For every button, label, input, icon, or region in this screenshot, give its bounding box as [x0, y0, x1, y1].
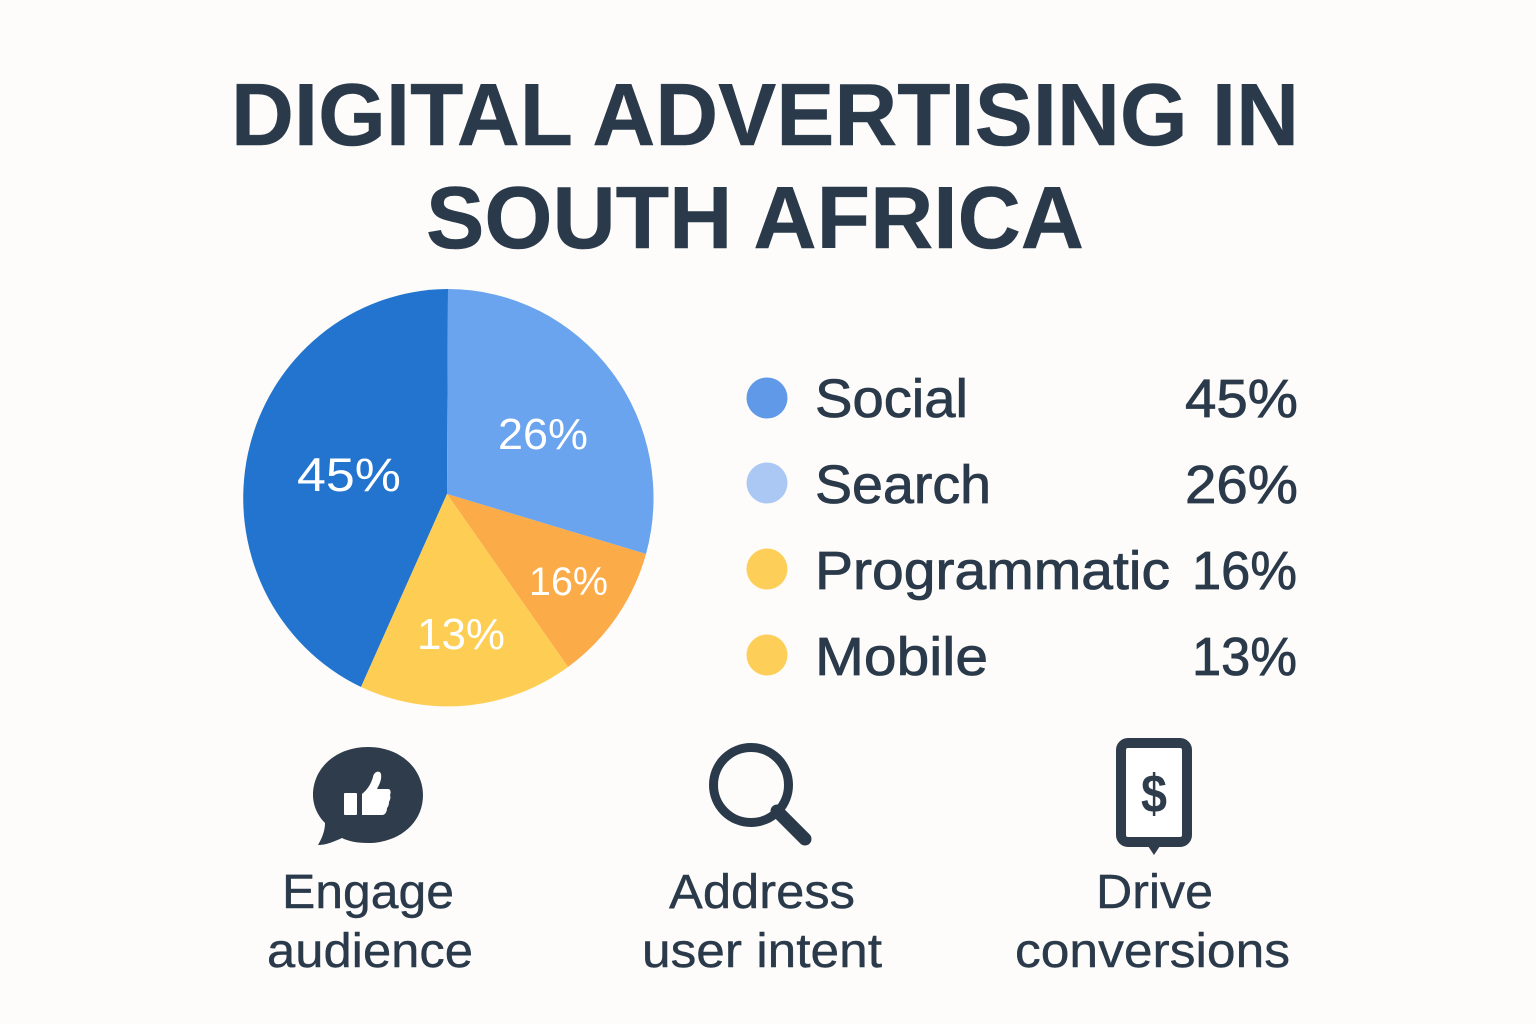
pie labels: 45%: [297, 448, 401, 501]
legend row: programmatic: Programmatic: [815, 541, 1170, 601]
legend row: mobile: Mobile: [815, 627, 988, 687]
pie labels: 16%: [529, 560, 608, 604]
icon: phone with dollar: $: [1141, 764, 1167, 824]
caption: address user intent: [642, 866, 882, 978]
title: SOUTH AFRICA: [426, 168, 1084, 267]
pie labels: 13%: [417, 610, 505, 659]
caption: drive conversions: conversions: [1015, 925, 1290, 978]
title: [231, 65, 1299, 267]
caption: engage audience: Engage: [282, 866, 454, 919]
legend row: social: Social: [815, 369, 968, 429]
slice: mobile 13%: [361, 494, 568, 706]
legend row: programmatic: 16%: [1192, 541, 1297, 601]
slice: social 45%: [243, 289, 448, 687]
legend row: search: Search: [815, 455, 991, 515]
slice: programmatic 16%: [447, 494, 646, 667]
slice: search 26%: [447, 289, 654, 554]
legend row: mobile: [746, 627, 1297, 687]
caption: address user intent: Address: [669, 866, 855, 919]
caption: engage audience: audience: [267, 925, 473, 978]
legend row: mobile: 13%: [1192, 627, 1297, 687]
legend row: social: [746, 369, 1298, 429]
pie labels: [297, 410, 608, 659]
pie labels: 26%: [498, 410, 588, 459]
legend row: social: 45%: [1185, 369, 1298, 429]
icon: speech bubble with thumbs up: [313, 747, 423, 845]
legend: [746, 369, 1298, 687]
caption: drive conversions: [1015, 866, 1290, 978]
title: DIGITAL ADVERTISING IN: [231, 65, 1299, 164]
caption: drive conversions: Drive: [1096, 866, 1213, 919]
legend row: search: [746, 455, 1298, 515]
legend row: search: 26%: [1185, 455, 1298, 515]
caption: address user intent: user intent: [642, 925, 882, 978]
caption: engage audience: [267, 866, 473, 978]
legend row: programmatic: [746, 541, 1297, 601]
pie chart: [243, 289, 654, 706]
icon: phone with dollar: [1121, 743, 1187, 855]
icon: magnifying glass: [714, 748, 805, 839]
